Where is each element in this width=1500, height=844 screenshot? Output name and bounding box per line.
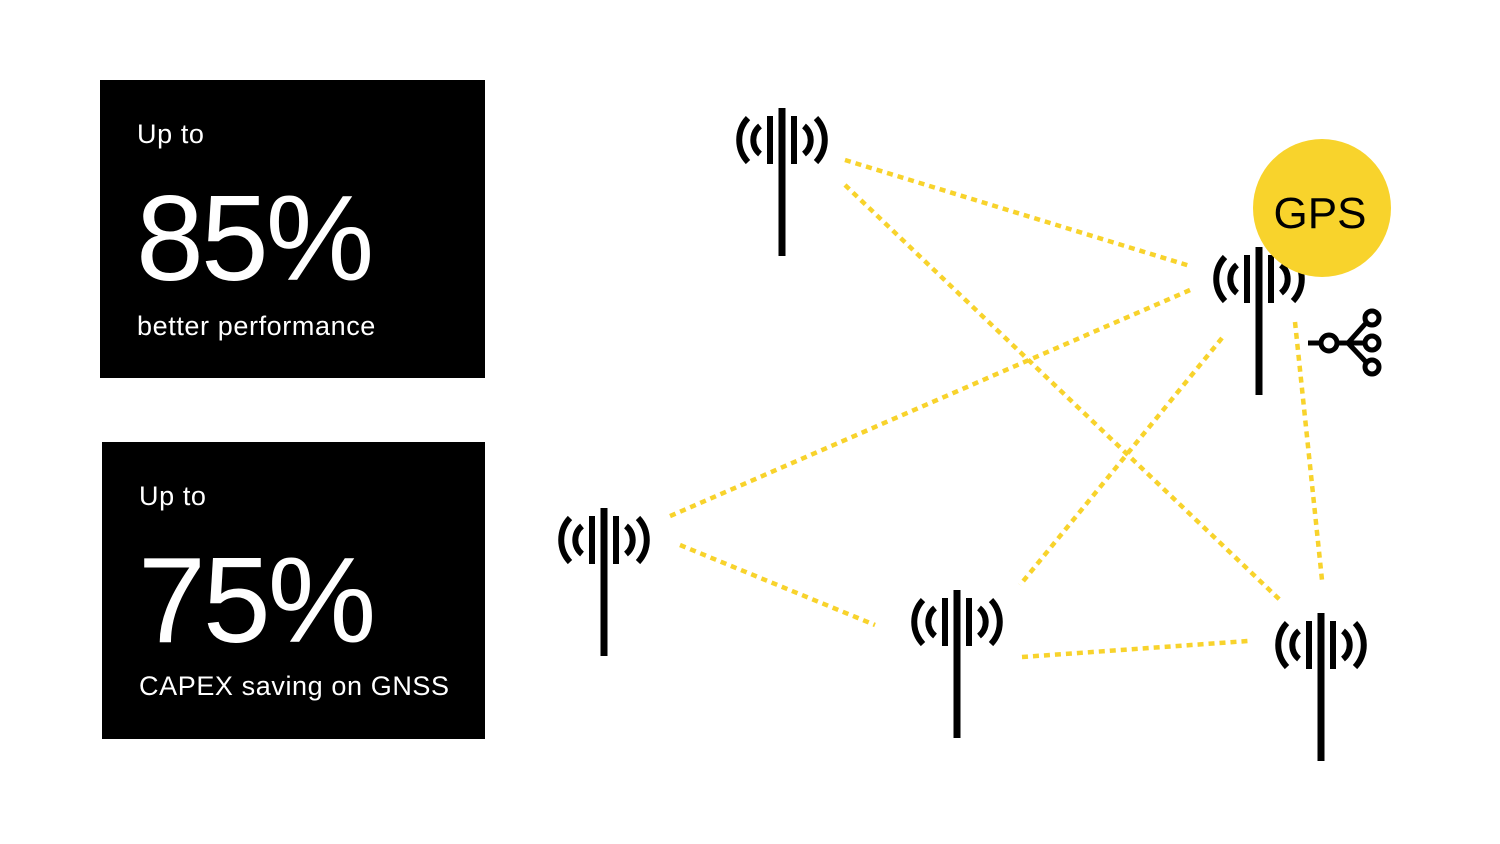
connection lines [668,160,1322,657]
icon: network share [1308,311,1379,374]
text: CAPEX saving on GNSS: CAPEX saving on GNSS [139,671,450,701]
icon: antenna GPS [1216,247,1302,395]
number: 75%: 75% [138,532,373,668]
number: 85%: 85% [136,170,371,306]
panel: 75% CAPEX saving [102,442,485,739]
panel: 85% better performance [100,80,485,378]
text: up to: Up to [139,481,207,511]
text: up to: Up to [137,119,205,149]
icon: antenna left [561,508,647,656]
text: better performance: better performance [137,311,376,341]
GPS badge: GPS [1274,189,1366,238]
icon: antenna top [739,108,825,256]
GPS badge [1253,139,1391,277]
icon: antenna middle [914,590,1000,738]
icon: antenna right [1278,613,1364,761]
